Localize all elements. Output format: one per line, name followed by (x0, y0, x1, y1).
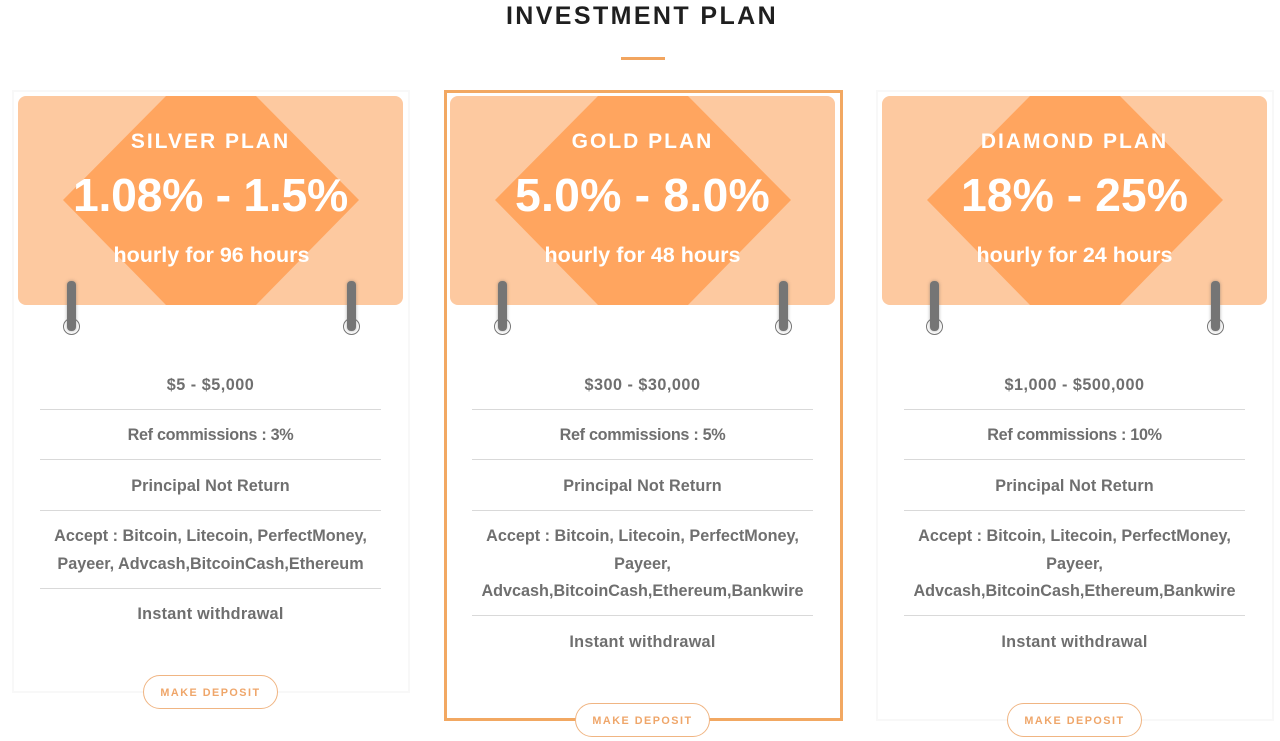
right pin (1207, 279, 1224, 335)
withdrawal note: Instant withdrawal (1001, 633, 1148, 651)
panel: gold plan (444, 90, 843, 737)
accepted payments (913, 527, 1236, 600)
deposit range: $1,000 - $500,000 (1005, 376, 1144, 394)
accepted payments: Accept : Bitcoin, Litecoin, PerfectMoney, (486, 527, 799, 545)
rate: 5.0% - 8.0% (515, 169, 770, 221)
right pin (775, 279, 792, 335)
right pin (343, 279, 360, 335)
accepted payments: Payeer, Advcash,BitcoinCash,Ethereum (57, 554, 364, 572)
accepted payments: Advcash,BitcoinCash,Ethereum,Bankwire (913, 582, 1236, 600)
panel: diamond plan (882, 96, 1267, 737)
accepted payments (54, 527, 367, 572)
button (1007, 703, 1142, 737)
left pin (63, 279, 80, 335)
deposit range: $5 - $5,000 (167, 376, 254, 394)
plan name: GOLD PLAN (572, 130, 713, 153)
withdrawal note: Instant withdrawal (569, 633, 716, 651)
left pin (494, 279, 511, 335)
panel: silver plan (18, 96, 403, 709)
plan name: SILVER PLAN (131, 130, 290, 153)
card frame (12, 90, 410, 693)
button: MAKE DEPOSIT (1024, 715, 1125, 727)
card frame (444, 90, 843, 721)
referral commission: Ref commissions : 5% (560, 426, 725, 444)
referral commission: Ref commissions : 10% (987, 426, 1162, 444)
principal note: Principal Not Return (131, 477, 290, 495)
principal note: Principal Not Return (563, 477, 722, 495)
button (143, 675, 278, 709)
accepted payments: Accept : Bitcoin, Litecoin, PerfectMoney, (54, 527, 367, 545)
rate: 1.08% - 1.5% (73, 169, 348, 221)
withdrawal note: Instant withdrawal (137, 605, 284, 623)
rate period: hourly for 96 hours (114, 243, 309, 267)
button: MAKE DEPOSIT (160, 687, 261, 699)
referral commission: Ref commissions : 3% (128, 426, 293, 444)
button: MAKE DEPOSIT (592, 715, 693, 727)
rate period: hourly for 24 hours (977, 243, 1172, 267)
plan name: DIAMOND PLAN (981, 130, 1168, 153)
left pin (926, 279, 943, 335)
accepted payments: Payeer, (614, 554, 671, 572)
title: INVESTMENT PLAN (506, 2, 778, 30)
title accent line (621, 57, 665, 60)
rate: 18% - 25% (961, 169, 1188, 221)
deposit range: $300 - $30,000 (585, 376, 700, 394)
plan header (450, 96, 835, 305)
plan header (18, 96, 403, 305)
rate period: hourly for 48 hours (545, 243, 740, 267)
accepted payments (481, 527, 804, 600)
button (575, 703, 710, 737)
accepted payments: Payeer, (1046, 554, 1103, 572)
accepted payments: Advcash,BitcoinCash,Ethereum,Bankwire (481, 582, 804, 600)
plan header (882, 96, 1267, 305)
accepted payments: Accept : Bitcoin, Litecoin, PerfectMoney, (918, 527, 1231, 545)
principal note: Principal Not Return (995, 477, 1154, 495)
card frame (876, 90, 1274, 721)
